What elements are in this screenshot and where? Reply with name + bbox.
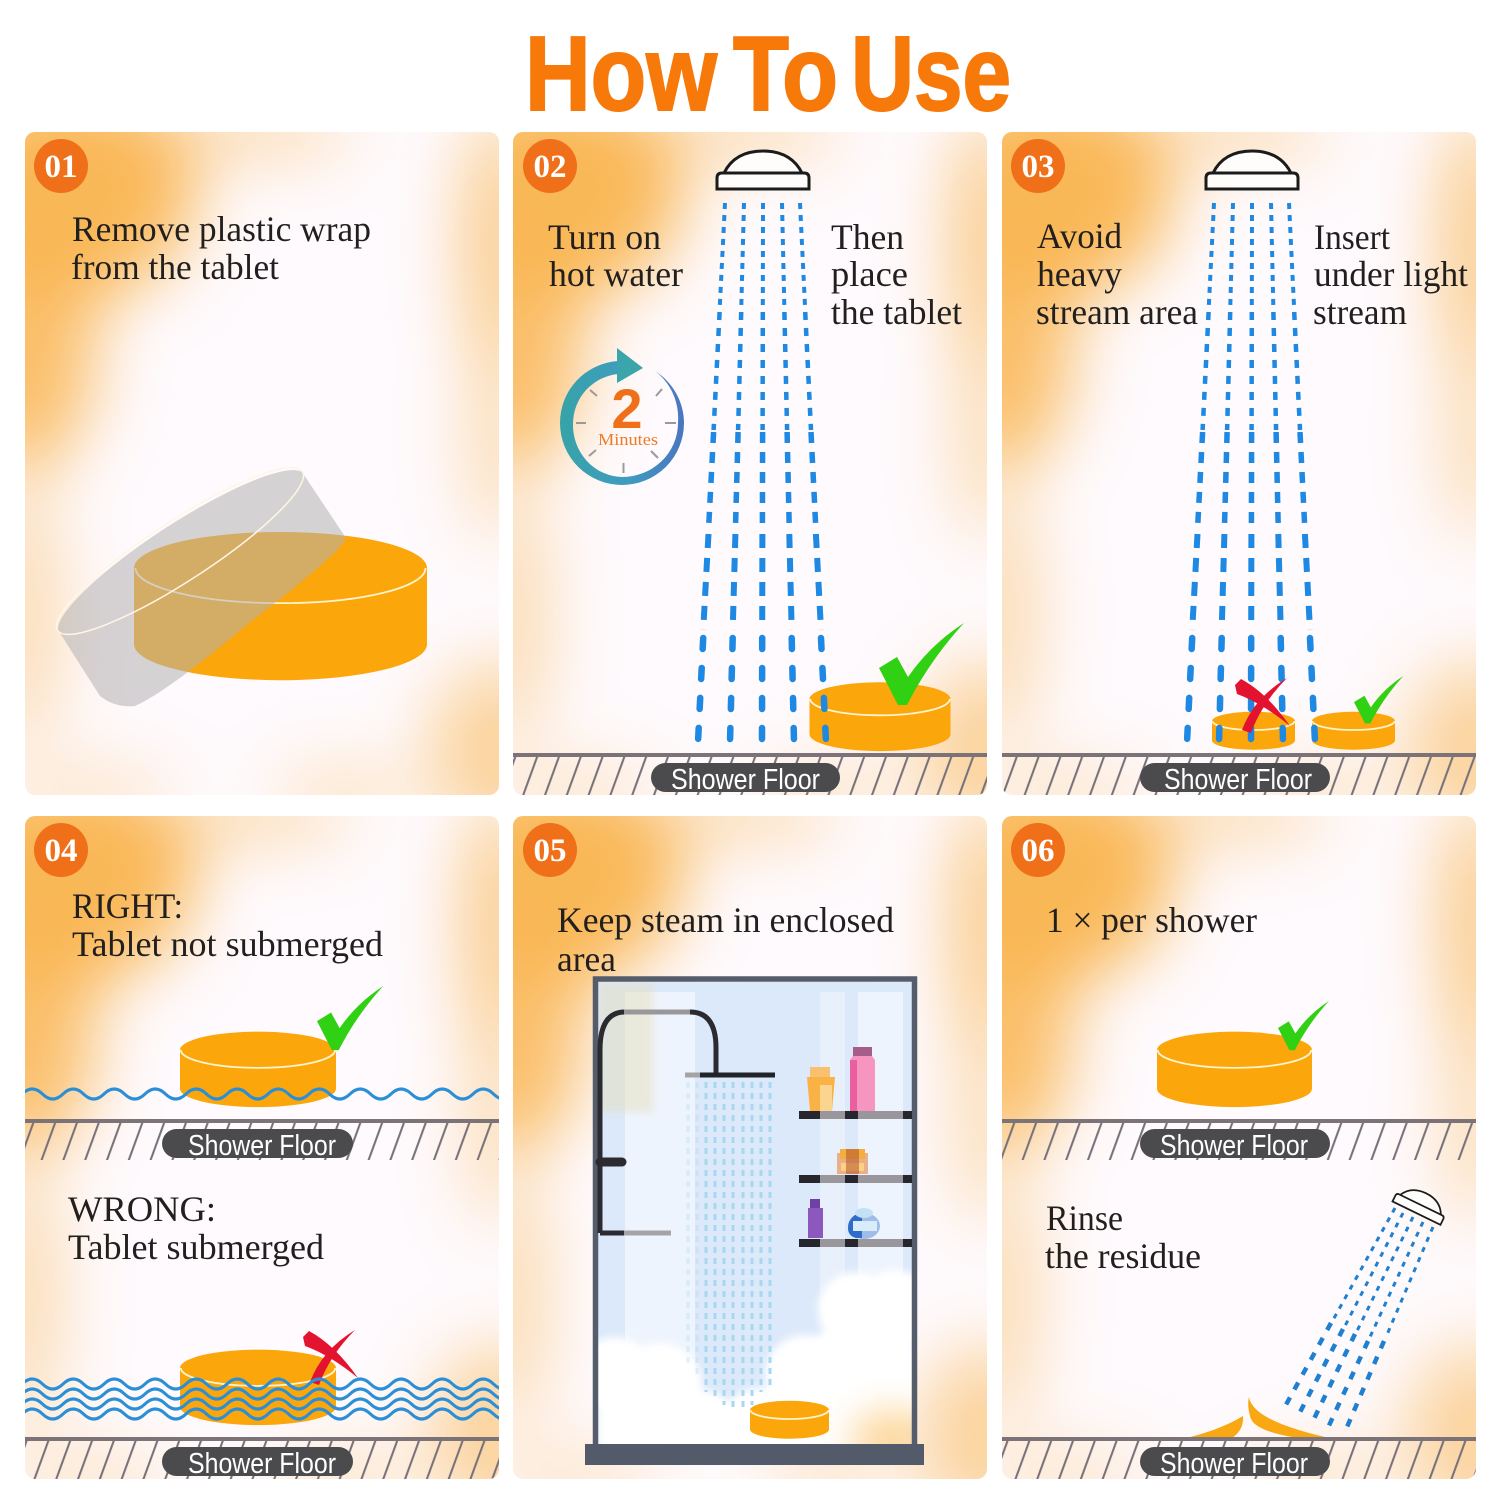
instruction text right [1314,226,1468,324]
icon: tablet under heavy stream [1212,712,1295,750]
instruction text: 1 × per shower [1046,900,1257,940]
title [525,15,1011,133]
icon: pink bottle [850,1047,875,1111]
cabin frame [596,979,914,1446]
panel: step 5 enclosed steam [423,766,1057,1500]
badge 06: 06 [1022,833,1054,869]
shower cabin interior [577,982,940,1472]
wrong text: WRONG: [68,1189,216,1229]
panel: step 2 turn on water [513,132,987,795]
icon: tablet [750,1401,829,1439]
icon: tablet [134,532,427,680]
water line [22,1089,534,1099]
shower floor bottom [25,1437,499,1480]
shower floor bottom: Shower Floor [1160,1448,1308,1480]
instruction text left: Avoid [1037,216,1122,256]
icon: orange bottle [807,1067,835,1111]
instruction text [557,900,894,979]
shower floor bottom: Shower Floor [188,1448,336,1480]
wrong text [68,1189,324,1267]
title: Use [851,15,1011,133]
wrong text: Tablet submerged [68,1227,324,1267]
rinse text [1045,1198,1201,1276]
badge 01 [34,139,88,193]
tablet residue [1186,1397,1325,1438]
icon: 2 minutes timer [560,348,684,485]
icon: 2 minutes timer: 2 [611,377,643,440]
instruction text left [548,226,683,286]
instruction text [72,216,370,280]
badge 01: 01 [44,149,78,185]
instruction text left [1037,222,1198,324]
badge 05 [523,823,577,877]
water stream [1187,203,1315,742]
shower floor: Shower Floor [1164,764,1312,796]
rinse text: the residue [1045,1236,1201,1276]
instruction text right: under light [1314,254,1468,294]
instruction text left: stream area [1036,292,1198,332]
rinse stream [1282,1208,1433,1432]
cabin base [585,1444,924,1465]
title: How [525,15,717,133]
icon: blue jar [848,1208,880,1239]
shower floor top [25,1119,499,1162]
shelves [799,1111,912,1247]
instruction text right: the tablet [831,292,962,332]
badge 03 [1011,139,1065,193]
instruction text: from the tablet [71,247,279,287]
instruction text right: stream [1313,292,1407,332]
instruction text right: Then [831,217,904,257]
instruction text: Keep steam in enclosed [557,900,894,940]
panel: step 6 once per shower and rinse [912,766,1500,1500]
icon: check mark [879,623,964,705]
icon: submerged tablet [180,1350,336,1425]
instruction text left: hot water [549,254,683,294]
icon: 2 minutes timer: Minutes [598,430,658,449]
icon: plastic wrap [56,467,346,706]
icon: red cross [303,1330,358,1385]
panel: step 3 light stream [912,82,1500,842]
icon: angled shower head [1392,1182,1450,1225]
instruction text right: place [831,254,908,294]
icon: tablet not submerged [180,1032,336,1107]
instruction text left: Turn on [548,217,661,257]
icon: tablet under light stream [1312,712,1395,750]
instruction text left: heavy [1037,254,1122,294]
title: To [733,15,838,133]
badge 02: 02 [534,149,566,185]
shower floor top: Shower Floor [188,1130,336,1162]
right text: Tablet not submerged [72,924,383,964]
icon: amber jar [837,1149,868,1174]
icon: check mark [1354,676,1403,724]
rinse text: Rinse [1046,1198,1123,1238]
shower floor: Shower Floor [671,764,820,796]
icon: tablet [1157,1032,1312,1107]
badge 05: 05 [534,833,566,869]
water curtain [688,1082,770,1407]
icon: tablet [810,682,950,751]
right text [72,894,383,964]
instruction text: area [557,939,616,979]
panel: step 1 remove wrap [25,132,499,795]
instruction text right [831,224,962,324]
badge 02 [523,139,577,193]
icon: check mark [317,986,383,1050]
instruction text right: Insert [1314,217,1390,257]
shower floor top [1002,1119,1476,1162]
water lines [22,1379,534,1419]
shower pipe [600,1012,775,1233]
icon: shower head [1206,151,1298,189]
badge 04: 04 [44,833,78,869]
icon: red cross [1235,678,1290,733]
shower floor top: Shower Floor [1160,1130,1308,1162]
water stream [698,203,826,742]
shower floor bottom [1002,1437,1476,1480]
badge 06 [1011,823,1065,877]
panel: step 4 right and wrong [25,816,499,1479]
shower floor [1002,753,1476,796]
instruction text: Remove plastic wrap [72,209,371,249]
right text: RIGHT: [72,886,183,926]
icon: purple bottle [808,1199,823,1238]
icon: shower head [717,151,809,189]
icon: check mark [1278,1001,1329,1050]
shower floor [513,753,987,796]
badge 04 [34,823,88,877]
badge 03: 03 [1022,149,1054,185]
